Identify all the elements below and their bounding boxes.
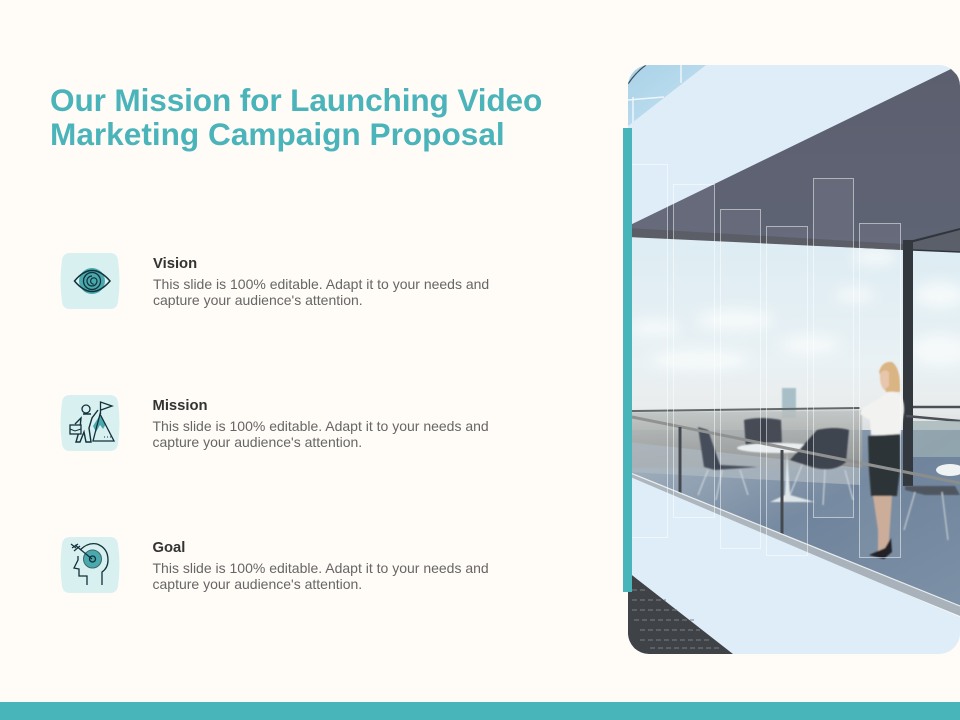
text block: goal	[152, 540, 489, 592]
title: Our Mission for Launching Video	[50, 82, 542, 118]
icon: climber with flag (mission)	[60, 395, 120, 451]
icon: eye (vision)	[60, 253, 120, 309]
teal vertical accent bar	[623, 128, 632, 592]
text block: vision: capture your audience's attention.	[153, 292, 363, 308]
woman	[860, 362, 904, 559]
furniture: chairs and table	[698, 418, 960, 540]
sky and clouds	[628, 236, 960, 436]
text block: mission	[152, 398, 489, 450]
roof	[628, 69, 960, 250]
floor through glass	[628, 430, 960, 606]
text block: goal: capture your audience's attention.	[152, 576, 362, 592]
text block: vision: Vision	[153, 256, 197, 272]
icon: head with target (goal)	[60, 537, 120, 593]
text block: mission: Mission	[152, 398, 208, 414]
text block: vision: This slide is 100% editable. Adapt it to your needs and	[153, 276, 489, 292]
title	[50, 82, 542, 152]
text block: mission: capture your audience's attention.	[152, 434, 362, 450]
photo panel: office balcony with overlay bars	[628, 65, 960, 654]
lower light blue panel	[628, 476, 960, 654]
footer bar	[0, 702, 960, 720]
text block: goal: Goal	[152, 540, 185, 556]
window frame	[903, 228, 960, 486]
title: Marketing Campaign Proposal	[50, 116, 505, 152]
glass railing	[628, 417, 960, 616]
skyline haze	[782, 388, 796, 418]
back rail	[632, 408, 860, 411]
city buildings bottom left	[628, 572, 733, 654]
overlay bars	[620, 164, 900, 558]
upper left skylight	[628, 65, 710, 128]
text block: vision	[153, 256, 489, 308]
text block: goal: This slide is 100% editable. Adapt it to your needs and	[152, 560, 489, 576]
text block: mission: This slide is 100% editable. Adapt it to your needs and	[152, 418, 489, 434]
upper light blue panel	[628, 65, 960, 226]
